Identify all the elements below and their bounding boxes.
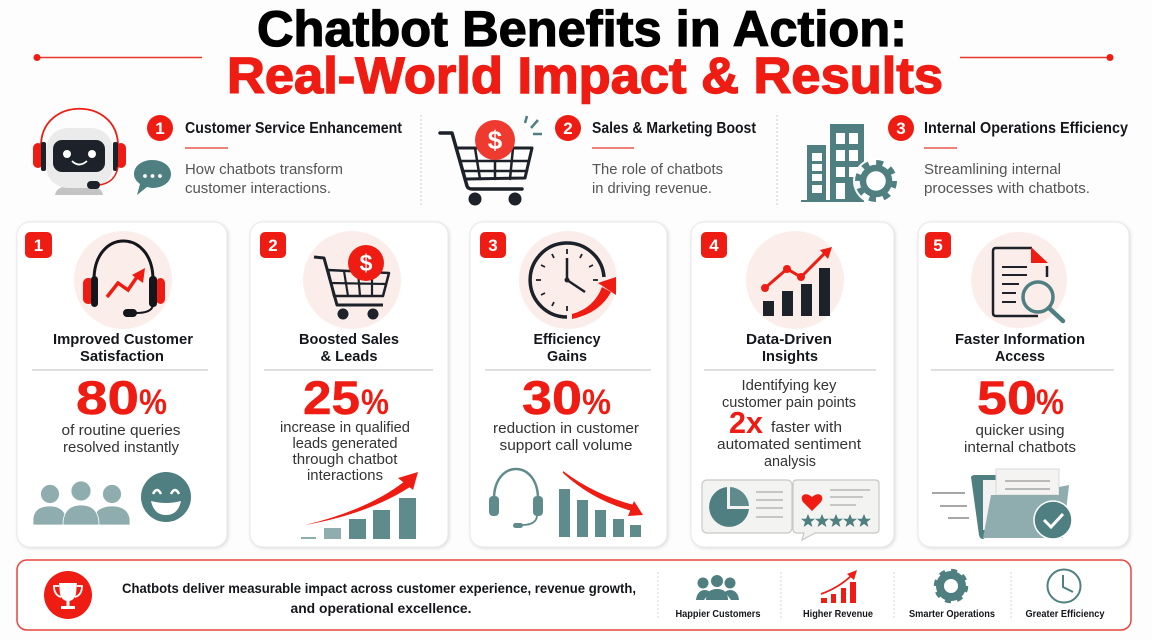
card number 1: 1	[34, 236, 43, 255]
description with 2x statistic: Identifying key	[742, 378, 837, 394]
bar chart rising	[301, 498, 416, 539]
benefit: higher revenue: Higher Revenue	[803, 608, 873, 620]
icon: bar chart with trend line	[746, 231, 844, 329]
benefit: smarter operations	[909, 570, 995, 620]
description: interactions	[307, 468, 383, 484]
description: customer interactions.	[185, 181, 331, 197]
card heading: Access	[995, 348, 1045, 365]
benefit: smarter operations: Smarter Operations	[909, 608, 995, 620]
arrow falling	[563, 471, 643, 516]
icon: headset with rising arrow	[74, 231, 172, 329]
card heading: Data-Driven	[746, 331, 832, 348]
icon: cart with dollar	[303, 231, 401, 329]
description: internal chatbots	[964, 440, 1076, 456]
description with 2x statistic: analysis	[764, 454, 816, 470]
statistic 50%	[977, 371, 1064, 424]
card number 5: 5	[933, 236, 943, 255]
statistic 30%: %	[582, 383, 611, 422]
benefit: happier customers	[676, 575, 761, 620]
card number 2: 2	[268, 236, 278, 255]
icon: teal headset	[489, 469, 543, 528]
description: The role of chatbots	[592, 162, 723, 178]
description: of routine queries	[62, 423, 180, 439]
statistic 25%: 25	[303, 371, 360, 424]
badge 3	[888, 115, 914, 141]
description: in driving revenue.	[592, 181, 712, 197]
title: Chatbot Benefits in Action:	[257, 1, 907, 57]
description with 2x statistic: customer pain points	[722, 395, 856, 411]
bar chart falling	[559, 489, 641, 537]
card number 2	[260, 232, 286, 258]
icon: document with magnifier	[971, 232, 1067, 328]
description: support call volume	[500, 438, 632, 454]
description: quicker using	[976, 423, 1064, 439]
summary text: Chatbots deliver measurable impact across customer experience, revenue growth,	[122, 580, 636, 596]
section: internal operations efficiency	[801, 115, 1128, 204]
statistic 30%	[522, 371, 611, 424]
heading: Customer Service Enhancement	[185, 120, 402, 137]
icon: smiley	[141, 472, 191, 522]
badge 1	[147, 115, 173, 141]
section: sales and marketing boost	[440, 115, 756, 206]
card number 4: 4	[709, 236, 719, 255]
badge 2	[555, 115, 581, 141]
benefit: higher revenue	[803, 570, 873, 620]
card heading: Efficiency	[534, 331, 601, 348]
icon: review bubble with heart and stars	[793, 480, 879, 540]
badge 3: 3	[896, 119, 906, 138]
icon: robot with headset	[33, 109, 126, 195]
title rule right	[960, 54, 1114, 61]
card number 3	[480, 232, 506, 258]
card heading: Gains	[547, 348, 587, 365]
description: through chatbot	[292, 452, 398, 468]
panel: card 1 improved customer satisfaction	[17, 222, 227, 547]
card heading: Insights	[762, 348, 818, 365]
card heading: Improved Customer	[53, 331, 193, 348]
icon: buildings and gear	[801, 124, 899, 204]
icon: shopping cart with dollar: $	[488, 125, 503, 155]
statistic 50%: %	[1036, 383, 1064, 422]
benefit: happier customers: Happier Customers	[676, 608, 761, 620]
description: leads generated	[292, 436, 398, 452]
card number 3: 3	[488, 236, 498, 255]
statistic 25%	[303, 371, 389, 424]
statistic 80%: 80	[76, 371, 139, 424]
description: reduction in customer	[493, 421, 639, 437]
badge 1: 1	[155, 119, 165, 138]
benefit: greater efficiency: Greater Efficiency	[1026, 608, 1105, 620]
description: processes with chatbots.	[924, 181, 1090, 197]
icon: folder with check	[932, 469, 1072, 539]
description with 2x statistic	[717, 378, 861, 470]
description with 2x statistic: faster with	[771, 420, 842, 436]
card heading: Boosted Sales	[299, 331, 399, 348]
statistic 30%: 30	[522, 371, 582, 424]
arrow rising	[305, 472, 418, 525]
statistic 80%	[76, 371, 167, 424]
panel: card 3 efficiency gains	[470, 222, 667, 547]
description: resolved instantly	[63, 440, 180, 456]
card number 1	[25, 232, 52, 258]
icon: report panel with pie chart	[702, 480, 792, 533]
description: increase in qualified	[280, 420, 410, 436]
title	[227, 1, 943, 104]
section: customer service enhancement	[33, 109, 402, 197]
panel: card 2 boosted sales and leads	[250, 222, 448, 547]
description with 2x statistic: 2x	[729, 405, 764, 440]
icon: clock with arrow	[519, 231, 617, 329]
panel: summary banner	[17, 560, 1131, 630]
title rule left	[34, 54, 202, 61]
card heading: Satisfaction	[80, 348, 164, 365]
icon: cart with dollar: $	[360, 250, 373, 276]
badge 2: 2	[563, 119, 573, 138]
summary text: and operational excellence.	[290, 600, 472, 616]
description: Streamlining internal	[924, 162, 1061, 178]
title: Real-World Impact & Results	[227, 47, 943, 104]
card number 4	[701, 232, 727, 258]
panel: card 4 data-driven insights	[691, 222, 894, 547]
statistic 50%: 50	[977, 371, 1037, 424]
card heading: Faster Information	[955, 331, 1085, 348]
card number 5	[925, 232, 951, 258]
icon: customers	[33, 481, 130, 525]
icon: shopping cart with dollar	[440, 116, 542, 206]
heading: Sales & Marketing Boost	[592, 120, 756, 137]
statistic 25%: %	[361, 383, 389, 422]
icon: chat bubble	[134, 160, 171, 195]
description with 2x statistic: automated sentiment	[717, 437, 861, 453]
benefit: greater efficiency	[1026, 570, 1105, 620]
icon: trophy	[44, 571, 92, 619]
heading: Internal Operations Efficiency	[924, 120, 1128, 137]
statistic 80%: %	[139, 383, 167, 422]
card heading: & Leads	[320, 348, 378, 365]
panel: card 5 faster information access	[918, 222, 1129, 547]
description: How chatbots transform	[185, 162, 343, 178]
